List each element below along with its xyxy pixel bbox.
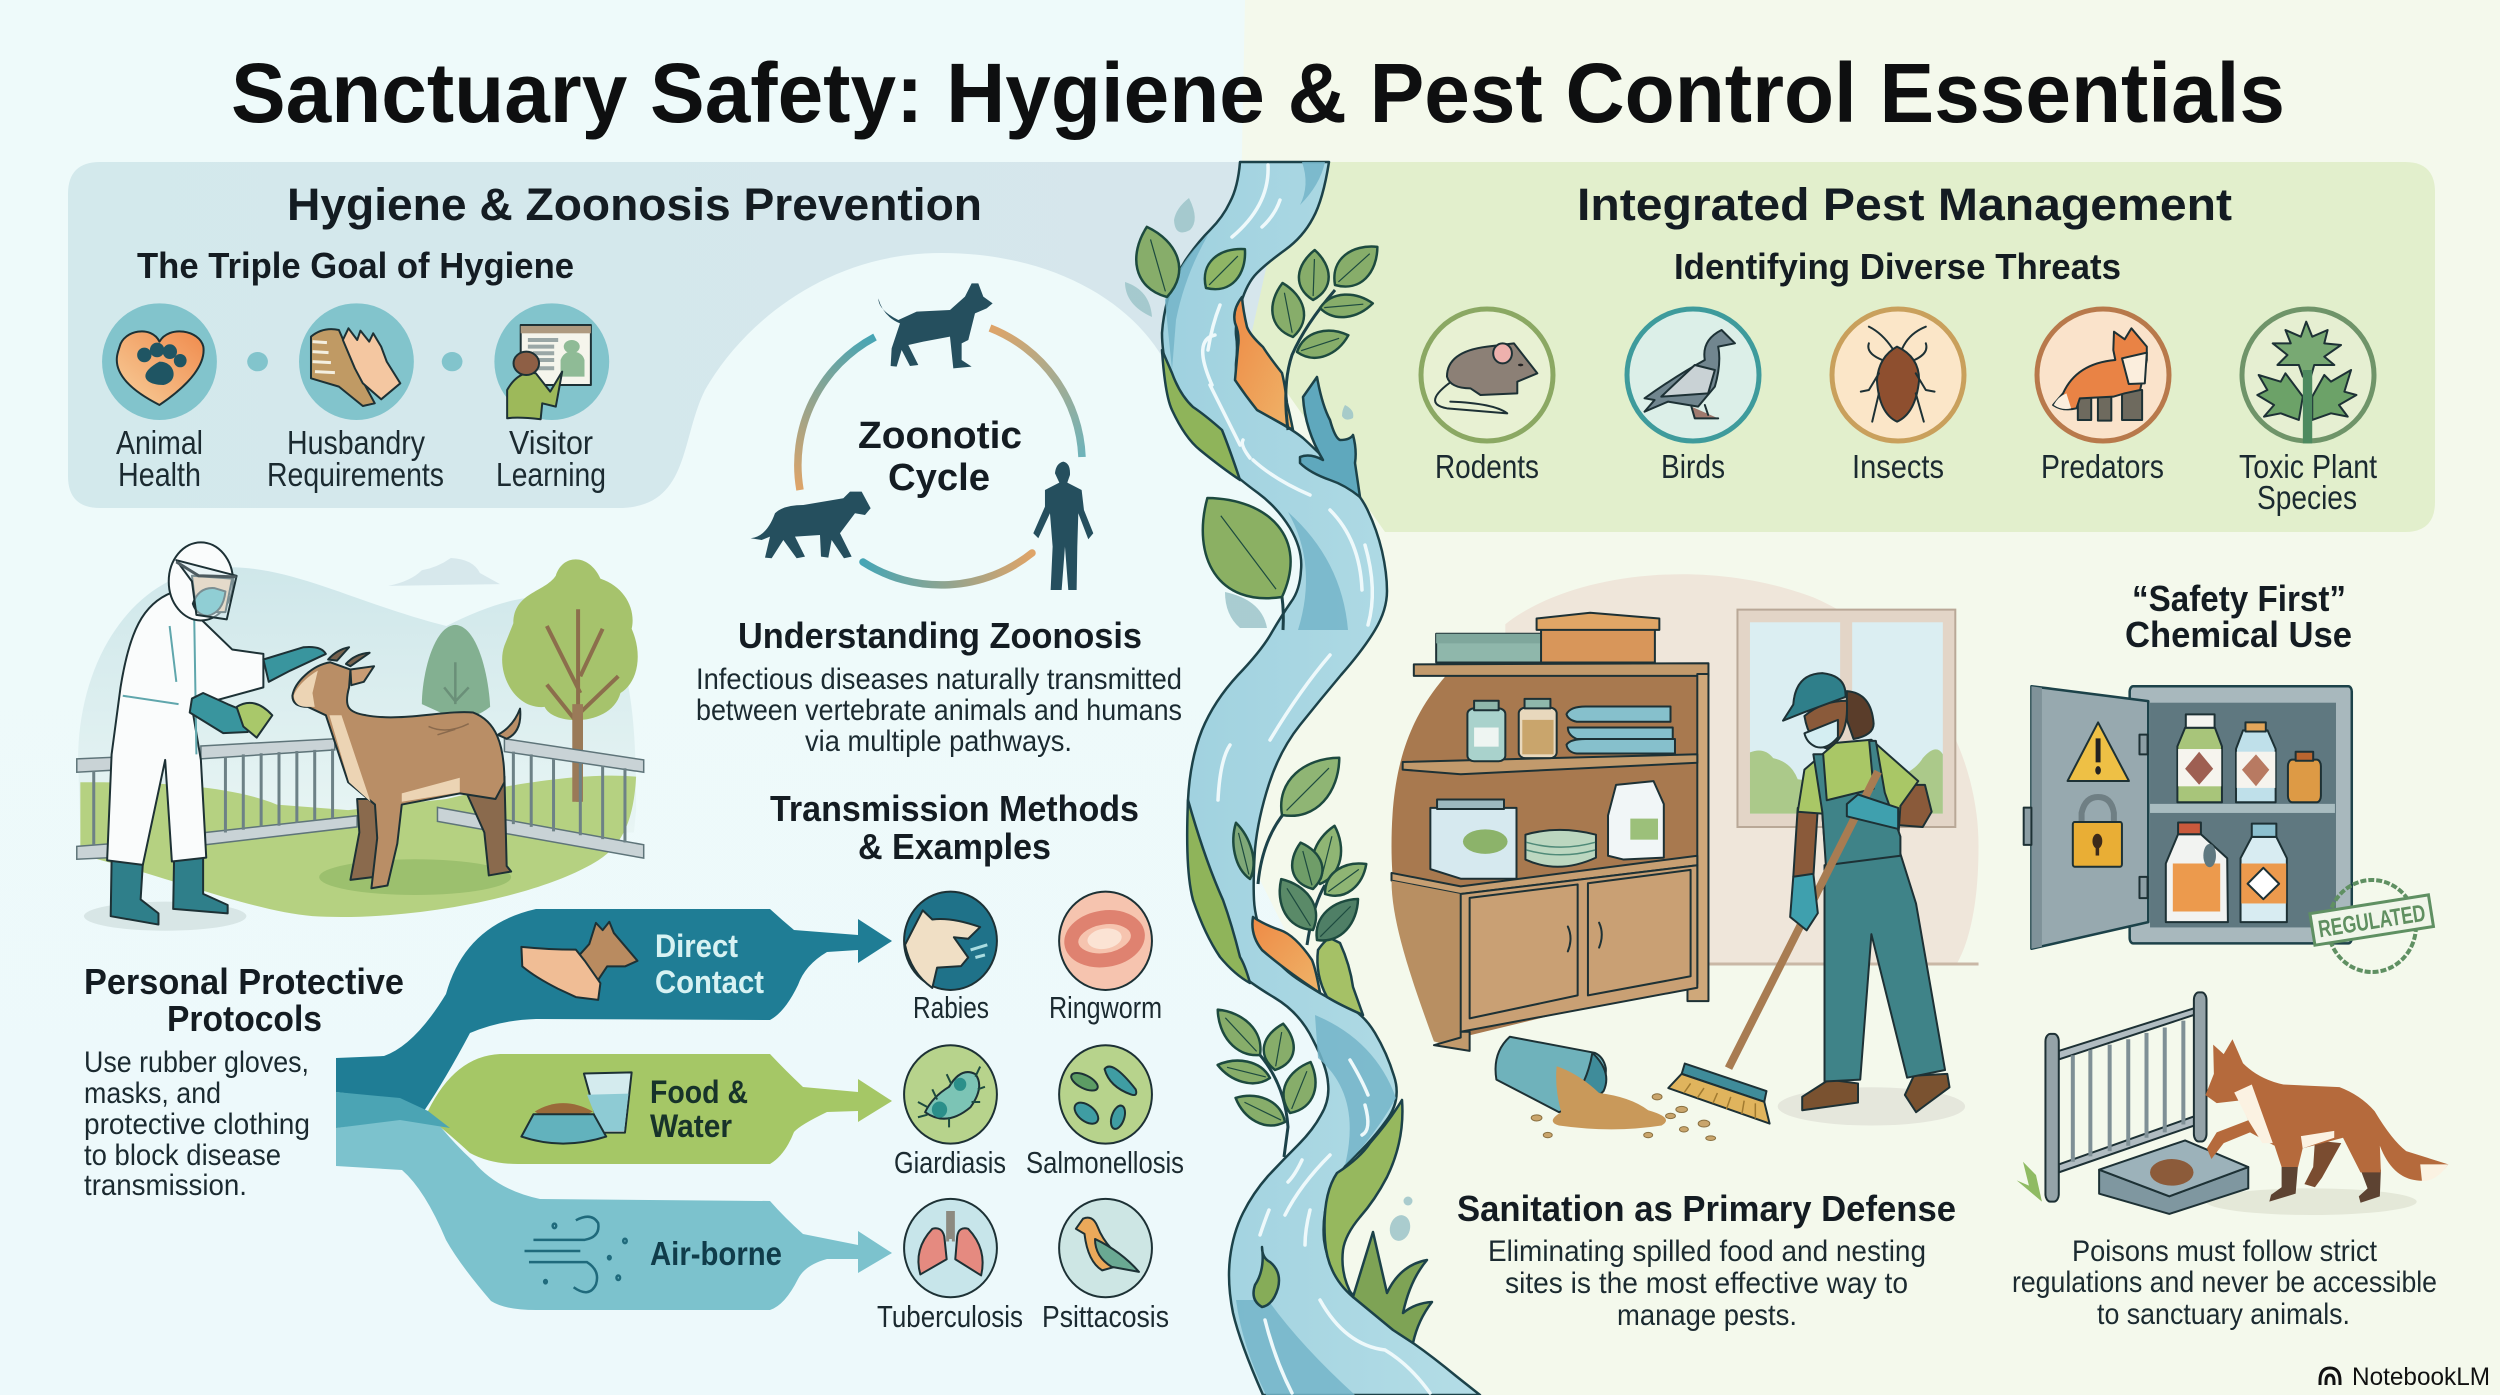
label: threat names: Toxic Plant xyxy=(2239,448,2377,485)
label: threat names: Birds xyxy=(1661,448,1725,485)
lawn xyxy=(80,776,636,917)
fox xyxy=(2205,1039,2448,1203)
goat shadow xyxy=(319,859,511,895)
label: zoonotic cycle xyxy=(858,415,1022,499)
river illustration xyxy=(1125,162,1480,1395)
background: right side xyxy=(1210,0,2500,1395)
cabinet door xyxy=(2031,686,2148,949)
text: personal protective protocols body: Use rubber gloves, xyxy=(84,1046,309,1079)
icon: predators xyxy=(2037,309,2169,441)
fence xyxy=(2045,992,2207,1202)
zoonotic cycle diagram xyxy=(751,283,1093,590)
label: animal health: Health xyxy=(118,456,201,493)
fence xyxy=(77,739,644,859)
text: personal protective protocols body xyxy=(84,1046,310,1202)
connector dot xyxy=(247,352,268,371)
heading: safety first chemical use: “Safety First” xyxy=(2132,578,2346,619)
text: personal protective protocols body: transmission. xyxy=(84,1169,247,1202)
small leaf in water xyxy=(1254,1247,1279,1307)
storage boxes xyxy=(1436,613,1659,662)
stamp: regulated: REGULATED xyxy=(2316,900,2427,943)
label: zoonotic cycle: Cycle xyxy=(888,457,990,499)
panel: integrated pest management xyxy=(1250,162,2435,532)
label: threat names: Predators xyxy=(2041,448,2164,485)
padlock xyxy=(2073,797,2122,867)
triple goal icons xyxy=(102,303,609,420)
cloud xyxy=(388,558,500,586)
connector dot xyxy=(442,352,462,371)
label: disease names: Giardiasis xyxy=(894,1145,1006,1180)
grass tuft xyxy=(2017,1162,2042,1202)
icon: toxic plant species xyxy=(2242,309,2374,443)
label: animal health xyxy=(116,424,203,493)
threat icons xyxy=(1421,309,2374,443)
label: visitor learning: Learning xyxy=(496,456,606,493)
icon: rabies xyxy=(904,892,997,990)
icon: hand petting dog xyxy=(521,922,637,1000)
icon: birds xyxy=(1627,309,1759,441)
text: personal protective protocols body: protective clothing xyxy=(84,1108,310,1141)
river highlights xyxy=(1203,165,1430,1393)
text: poison regulations xyxy=(2012,1235,2437,1331)
label: food and water: Water xyxy=(650,1108,732,1144)
disease icons xyxy=(904,892,1152,1297)
icon: food bowl and water glass xyxy=(521,1072,632,1144)
river leaves xyxy=(1127,221,1388,1133)
heading: personal protective protocols: Personal Protective xyxy=(84,961,404,1002)
text: sanitation body: sites is the most effective way to xyxy=(1505,1267,1908,1300)
orange leaf upper xyxy=(1234,297,1293,430)
illustration: fence, bait tray and fox xyxy=(2017,992,2448,1215)
green bank middle xyxy=(1187,800,1250,983)
text: personal protective protocols body: to block disease xyxy=(84,1139,281,1172)
icon: visitor learning xyxy=(494,303,609,420)
heading: sanitation as primary defense: Sanitation as Primary Defense xyxy=(1457,1188,1956,1229)
icon: psittacosis xyxy=(1059,1199,1152,1297)
text: sanitation body: Eliminating spilled food and nesting xyxy=(1488,1235,1926,1268)
text: understanding zoonosis body: via multiple pathways. xyxy=(805,725,1072,758)
heading: personal protective protocols: Protocols xyxy=(167,998,322,1039)
arrow: food and water xyxy=(336,1054,892,1164)
text: understanding zoonosis body xyxy=(696,663,1182,758)
icon: insects xyxy=(1832,309,1964,441)
label: disease names xyxy=(877,990,1184,1334)
label: husbandry requirements xyxy=(267,424,444,493)
large tree xyxy=(502,559,638,802)
door hinges xyxy=(2024,735,2148,898)
label: disease names: Psittacosis xyxy=(1042,1299,1169,1334)
label: threat names xyxy=(1435,448,2377,516)
label: threat names: Species xyxy=(2257,479,2357,516)
green hill by orange leaf xyxy=(1317,938,1363,1015)
door strip xyxy=(2031,686,2042,949)
cabinet body xyxy=(2130,686,2352,943)
heading: safety first chemical use xyxy=(2125,578,2352,655)
arrow: air-borne xyxy=(336,1111,892,1310)
pale leaves and droplets xyxy=(1125,198,1413,1243)
text: sanitation body: manage pests. xyxy=(1617,1299,1797,1332)
label: threat names: Rodents xyxy=(1435,448,1539,485)
panel: hygiene and zoonosis prevention xyxy=(68,162,1270,508)
label: direct contact xyxy=(655,928,764,1000)
stamp: regulated xyxy=(2310,880,2433,972)
leaf stems xyxy=(1258,290,1335,1157)
label: threat names: Insects xyxy=(1852,448,1944,485)
icon: salmonellosis xyxy=(1059,1045,1152,1144)
icon: air particles xyxy=(525,1217,627,1292)
heading: understanding zoonosis: Understanding Zoonosis xyxy=(738,615,1142,656)
window xyxy=(1737,610,1955,827)
title: Sanctuary Safety: Hygiene & Pest Control Essentials xyxy=(231,46,2285,140)
label: direct contact: Direct xyxy=(655,928,738,964)
goat xyxy=(292,647,520,888)
text: sanitation body xyxy=(1488,1235,1926,1332)
label: air-borne: Air-borne xyxy=(650,1235,782,1272)
heading: transmission methods and examples: & Examples xyxy=(858,826,1051,867)
heading: safety first chemical use: Chemical Use xyxy=(2125,614,2352,655)
subheading: the triple goal of hygiene: The Triple Goal of Hygiene xyxy=(137,245,574,286)
shelf back xyxy=(1392,674,1697,1038)
text: poison regulations: regulations and never be accessible xyxy=(2012,1266,2437,1299)
heading: transmission methods and examples xyxy=(770,788,1139,867)
river darker currents xyxy=(1165,162,1396,1395)
icon: tuberculosis xyxy=(904,1199,997,1297)
silhouettes of dog, cat and human xyxy=(751,283,1093,590)
label: husbandry requirements: Requirements xyxy=(267,456,444,493)
small tree xyxy=(422,625,490,718)
heading: hygiene and zoonosis prevention: Hygiene & Zoonosis Prevention xyxy=(287,179,982,230)
label: animal health: Animal xyxy=(116,424,203,461)
chemical bottles xyxy=(2166,714,2321,922)
orange leaf lower xyxy=(1252,917,1320,993)
icon: husbandry requirements xyxy=(299,303,414,420)
illustration: sanitation storage room and sweeping worker xyxy=(1392,574,1979,1140)
warning triangle xyxy=(2068,722,2129,781)
fox shadow xyxy=(2206,1188,2417,1215)
cabinet interior xyxy=(2150,703,2336,927)
grass at river bank xyxy=(1353,1232,1432,1343)
blue splash xyxy=(1300,377,1360,497)
cycle arcs xyxy=(798,328,1082,585)
label: visitor learning: Visitor xyxy=(509,424,593,461)
shelf xyxy=(2150,804,2335,813)
label: husbandry requirements: Husbandry xyxy=(287,424,425,461)
icon: ringworm xyxy=(1059,892,1152,990)
text: poison regulations: to sanctuary animals. xyxy=(2097,1298,2350,1331)
green bank upper xyxy=(1162,350,1240,480)
spilled food xyxy=(1531,1066,1716,1140)
heading: transmission methods and examples: Transmission Methods xyxy=(770,788,1139,829)
worker shadow xyxy=(84,902,246,931)
label: disease names: Tuberculosis xyxy=(877,1299,1023,1334)
heading: integrated pest management: Integrated Pest Management xyxy=(1577,179,2232,230)
label: food and water xyxy=(650,1074,748,1144)
heading: personal protective protocols xyxy=(84,961,404,1039)
icon: animal health xyxy=(102,303,217,420)
label: disease names: Rabies xyxy=(913,990,989,1025)
text: understanding zoonosis body: Infectious diseases naturally transmitted xyxy=(696,663,1182,696)
text: personal protective protocols body: masks, and xyxy=(84,1077,221,1110)
icon: giardiasis xyxy=(904,1045,997,1144)
illustration: worker in protective suit with goat xyxy=(77,542,644,931)
icon: rodents xyxy=(1421,309,1553,441)
floor line xyxy=(1708,963,1979,966)
illustration: locked chemical cabinet xyxy=(2024,686,2352,949)
footer: notebooklm logo: NotebookLM xyxy=(2352,1363,2490,1391)
worker in white protective suit xyxy=(107,542,326,925)
jars, towels and supplies xyxy=(1430,699,1675,879)
label: disease names: Salmonellosis xyxy=(1026,1145,1184,1180)
text: poison regulations: Poisons must follow strict xyxy=(2072,1235,2378,1268)
text: understanding zoonosis body: between vertebrate animals and humans xyxy=(696,694,1182,727)
wall xyxy=(1505,574,1979,965)
label: direct contact: Contact xyxy=(655,964,764,1000)
worker sweeping xyxy=(1668,673,1965,1126)
river water xyxy=(1162,162,1480,1395)
label: zoonotic cycle: Zoonotic xyxy=(858,415,1022,457)
transmission flow arrows xyxy=(336,909,892,1310)
merged stream xyxy=(336,1092,450,1128)
label: disease names: Ringworm xyxy=(1049,990,1162,1025)
cabinet xyxy=(1392,663,1708,1051)
sky xyxy=(78,567,636,832)
bait tray xyxy=(2099,1140,2248,1214)
green bank lower xyxy=(1324,1100,1402,1297)
bucket xyxy=(1496,1037,1606,1112)
label: food and water: Food & xyxy=(650,1074,748,1110)
label: visitor learning xyxy=(496,424,606,493)
subheading: identifying diverse threats: Identifying Diverse Threats xyxy=(1674,246,2121,287)
arrow: direct contact xyxy=(336,909,892,1111)
